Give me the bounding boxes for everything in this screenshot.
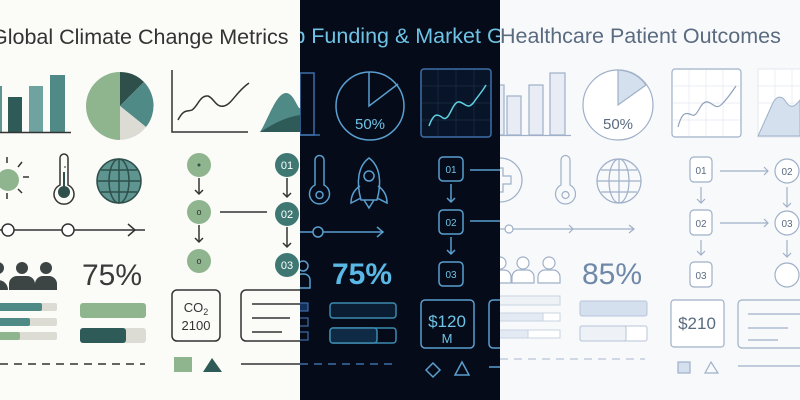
card: $210: $210 <box>678 314 716 333</box>
icon: people <box>0 262 57 290</box>
card: CO2 2100: 2 <box>203 307 208 317</box>
pie chart <box>583 70 653 140</box>
stat: 75%: 75% <box>82 259 142 292</box>
card: $210 <box>671 300 724 347</box>
flow diagram: 01 <box>695 166 707 177</box>
bar outline <box>300 73 320 135</box>
progress bars large <box>580 301 647 341</box>
flow diagram: 03 <box>695 271 707 282</box>
small bars partial <box>300 302 309 341</box>
people partial <box>300 260 311 289</box>
area chart <box>758 69 800 137</box>
pie outline <box>336 72 404 140</box>
flow boxes <box>439 157 500 286</box>
card: text lines <box>240 289 300 342</box>
icon: thermometer <box>556 156 576 204</box>
card: $120 M <box>421 300 474 348</box>
flow boxes: 01 <box>445 165 457 176</box>
flow: numbered nodes: 02 <box>281 209 293 221</box>
icon: rocket <box>351 158 387 208</box>
icon: thermometer <box>54 154 74 204</box>
large bars <box>330 303 396 343</box>
timeline <box>300 227 383 237</box>
dashed line <box>0 363 145 365</box>
flow: green nodes: o <box>196 256 202 266</box>
line chart <box>172 70 249 132</box>
title: funding: Startup Funding & Market Growth <box>236 24 556 48</box>
legend shapes <box>174 357 300 372</box>
progress bars small <box>0 303 57 340</box>
card partial <box>488 299 500 349</box>
title: healthcare: Healthcare Patient Outcomes <box>500 24 781 48</box>
flow: green nodes <box>187 153 267 273</box>
flow boxes: 02 <box>445 218 457 229</box>
flow diagram <box>690 157 799 287</box>
chart box <box>672 69 741 137</box>
timeline <box>500 225 634 233</box>
dashed line <box>500 358 645 360</box>
area chart <box>260 93 300 132</box>
legend shapes <box>426 362 500 377</box>
stat: 85%: 85% <box>582 258 642 291</box>
pie outline: 50% <box>355 116 385 133</box>
pie chart <box>86 72 154 140</box>
icon: medical cross <box>478 158 522 202</box>
card: CO2 2100 <box>172 290 220 341</box>
flow diagram: 03 <box>781 219 793 230</box>
flow: numbered nodes: 03 <box>281 260 293 272</box>
panel: healthcare (right) <box>500 28 800 374</box>
icon: sun <box>0 157 29 199</box>
card: $120 M: M <box>442 331 452 346</box>
panel: climate (left) <box>0 28 300 372</box>
bar chart <box>0 75 71 132</box>
panel: startup funding (middle, dark) <box>300 0 500 400</box>
flow: numbered nodes: 01 <box>281 160 293 172</box>
flow diagram: 02 <box>781 167 793 178</box>
progress bars small <box>496 296 560 338</box>
flow: green nodes: o <box>196 207 202 217</box>
bar chart <box>496 73 571 136</box>
icon: people <box>489 257 560 283</box>
card: text lines <box>738 300 800 348</box>
stat: 75%: 75% <box>332 258 392 291</box>
flow diagram: 02 <box>695 219 707 230</box>
icon: globe <box>97 159 141 203</box>
card: CO2 2100: 2100 <box>182 318 210 333</box>
flow boxes: 03 <box>445 270 457 281</box>
card: CO2 2100: CO <box>184 300 203 315</box>
pie chart: 50% <box>603 116 633 133</box>
chart box <box>421 69 491 137</box>
legend shapes <box>678 362 800 373</box>
flow: numbered nodes <box>275 153 299 277</box>
icon: thermometer <box>310 156 330 204</box>
timeline <box>0 224 145 236</box>
card: $120 M: $120 <box>428 312 466 331</box>
progress bars large <box>80 303 146 343</box>
dashed line <box>300 363 396 365</box>
icon: globe <box>597 159 641 203</box>
